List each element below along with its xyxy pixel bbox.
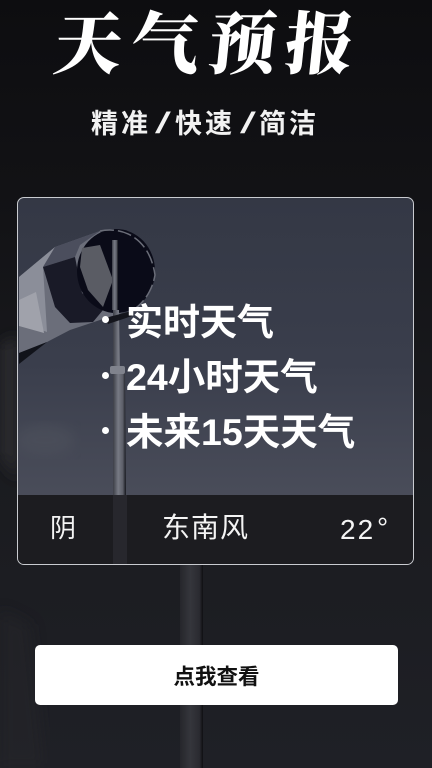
wind direction: 东南风 bbox=[162, 512, 249, 543]
subtitle: / bbox=[155, 107, 171, 140]
subtitle: / bbox=[240, 107, 256, 140]
bottom weather strip bbox=[18, 495, 413, 564]
subtitle bbox=[91, 107, 319, 140]
cloud highlights bbox=[15, 424, 75, 456]
temperature: 22 bbox=[340, 514, 375, 545]
temperature bbox=[340, 512, 390, 545]
list item: 24 hours: 24小时天气 bbox=[126, 356, 318, 398]
panel: weather card bbox=[17, 197, 414, 565]
button: 点我查看 bbox=[173, 665, 260, 689]
temperature: ° bbox=[377, 512, 390, 543]
pole bbox=[112, 240, 118, 310]
sock mouth bbox=[77, 229, 155, 313]
list item: realtime: 实时天气 bbox=[126, 302, 274, 343]
subtitle: 精准 bbox=[91, 109, 151, 139]
button bbox=[35, 645, 398, 705]
subtitle: 快速 bbox=[175, 109, 235, 139]
sock body bbox=[19, 231, 125, 353]
title: 天气预报 bbox=[50, 7, 366, 83]
feature list bbox=[102, 302, 355, 453]
condition: 阴 bbox=[50, 513, 76, 543]
list item: 15 days: 未来15天天气 bbox=[126, 411, 355, 453]
subtitle: 简洁 bbox=[259, 109, 319, 139]
